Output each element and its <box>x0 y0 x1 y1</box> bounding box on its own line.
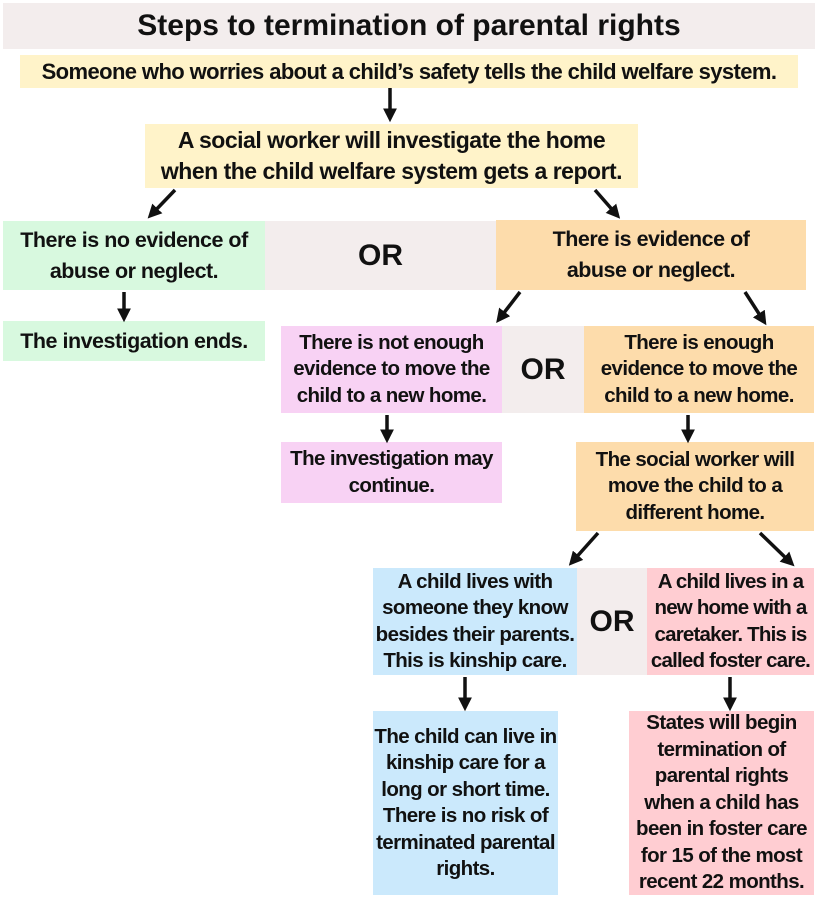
box: foster: caretaker. This is <box>654 622 806 646</box>
box: no evidence: abuse or neglect. <box>50 258 218 282</box>
box: kinship: besides their parents. <box>376 622 574 646</box>
box: foster outcome: when a child has <box>644 791 799 814</box>
box: may continue <box>281 442 502 503</box>
box: kinship outcome: terminated parental <box>376 830 555 854</box>
box: foster: A child lives in a <box>658 570 803 592</box>
box: report: Someone who worries about a child’s safety tells the child welfare system. <box>42 58 776 84</box>
box: not enough evidence <box>281 326 502 413</box>
box: kinship: someone they know <box>382 596 568 619</box>
box: foster outcome <box>629 711 814 895</box>
box: investigation ends <box>3 321 265 361</box>
box: kinship outcome: rights. <box>436 857 495 880</box>
box: kinship: This is kinship care. <box>383 649 567 672</box>
box: foster outcome: for 15 of the most <box>641 844 802 867</box>
title <box>3 3 815 49</box>
box: evidence: abuse or neglect. <box>567 258 735 282</box>
box: enough evidence <box>584 326 814 413</box>
box: move child: The social worker will <box>596 448 794 471</box>
box: foster outcome: been in foster care <box>636 817 807 840</box>
box: no evidence: There is no evidence of <box>20 228 248 252</box>
box: foster <box>647 568 814 675</box>
box: kinship outcome: There is no risk of <box>383 804 548 827</box>
box: investigation ends: The investigation ends. <box>20 328 248 352</box>
box: enough evidence: evidence to move the <box>601 357 797 380</box>
box: not enough evidence: evidence to move the <box>293 357 490 380</box>
OR 1 <box>265 221 496 290</box>
box: foster outcome: States will begin <box>646 711 797 734</box>
box: kinship outcome: The child can live in <box>374 724 557 748</box>
box: kinship outcome: long or short time. <box>381 778 550 800</box>
OR 2: OR <box>520 352 566 386</box>
box: foster: new home with a <box>654 596 806 619</box>
box: may continue: The investigation may <box>290 447 493 470</box>
box: evidence <box>496 220 806 290</box>
OR 3: OR <box>590 604 634 638</box>
box: not enough evidence: child to a new home. <box>297 384 486 407</box>
box: move child: move the child to a <box>608 474 782 497</box>
title: Steps to termination of parental rights <box>137 9 681 42</box>
box: kinship <box>373 568 577 675</box>
box: kinship outcome <box>373 711 558 895</box>
box: move child: different home. <box>625 501 765 524</box>
box: investigate <box>145 124 638 188</box>
box: evidence: There is evidence of <box>553 227 749 251</box>
OR 1: OR <box>358 238 403 272</box>
box: enough evidence: There is enough <box>624 331 774 354</box>
box: move child <box>576 442 814 531</box>
box: kinship: A child lives with <box>398 570 552 592</box>
box: investigate: when the child welfare system gets a report. <box>161 158 622 184</box>
box: not enough evidence: There is not enough <box>299 331 484 354</box>
box: foster outcome: termination of <box>657 738 786 761</box>
box: foster: called foster care. <box>651 649 810 672</box>
box: foster outcome: parental rights <box>655 764 788 787</box>
box: kinship outcome: kinship care for a <box>386 751 545 774</box>
box: may continue: continue. <box>349 474 434 496</box>
box: enough evidence: child to a new home. <box>604 384 794 407</box>
box: foster outcome: recent 22 months. <box>639 870 804 893</box>
box: no evidence <box>3 221 265 290</box>
OR 2 <box>502 326 584 413</box>
box: investigate: A social worker will investigate the home <box>178 127 605 153</box>
OR 3 <box>577 568 647 675</box>
